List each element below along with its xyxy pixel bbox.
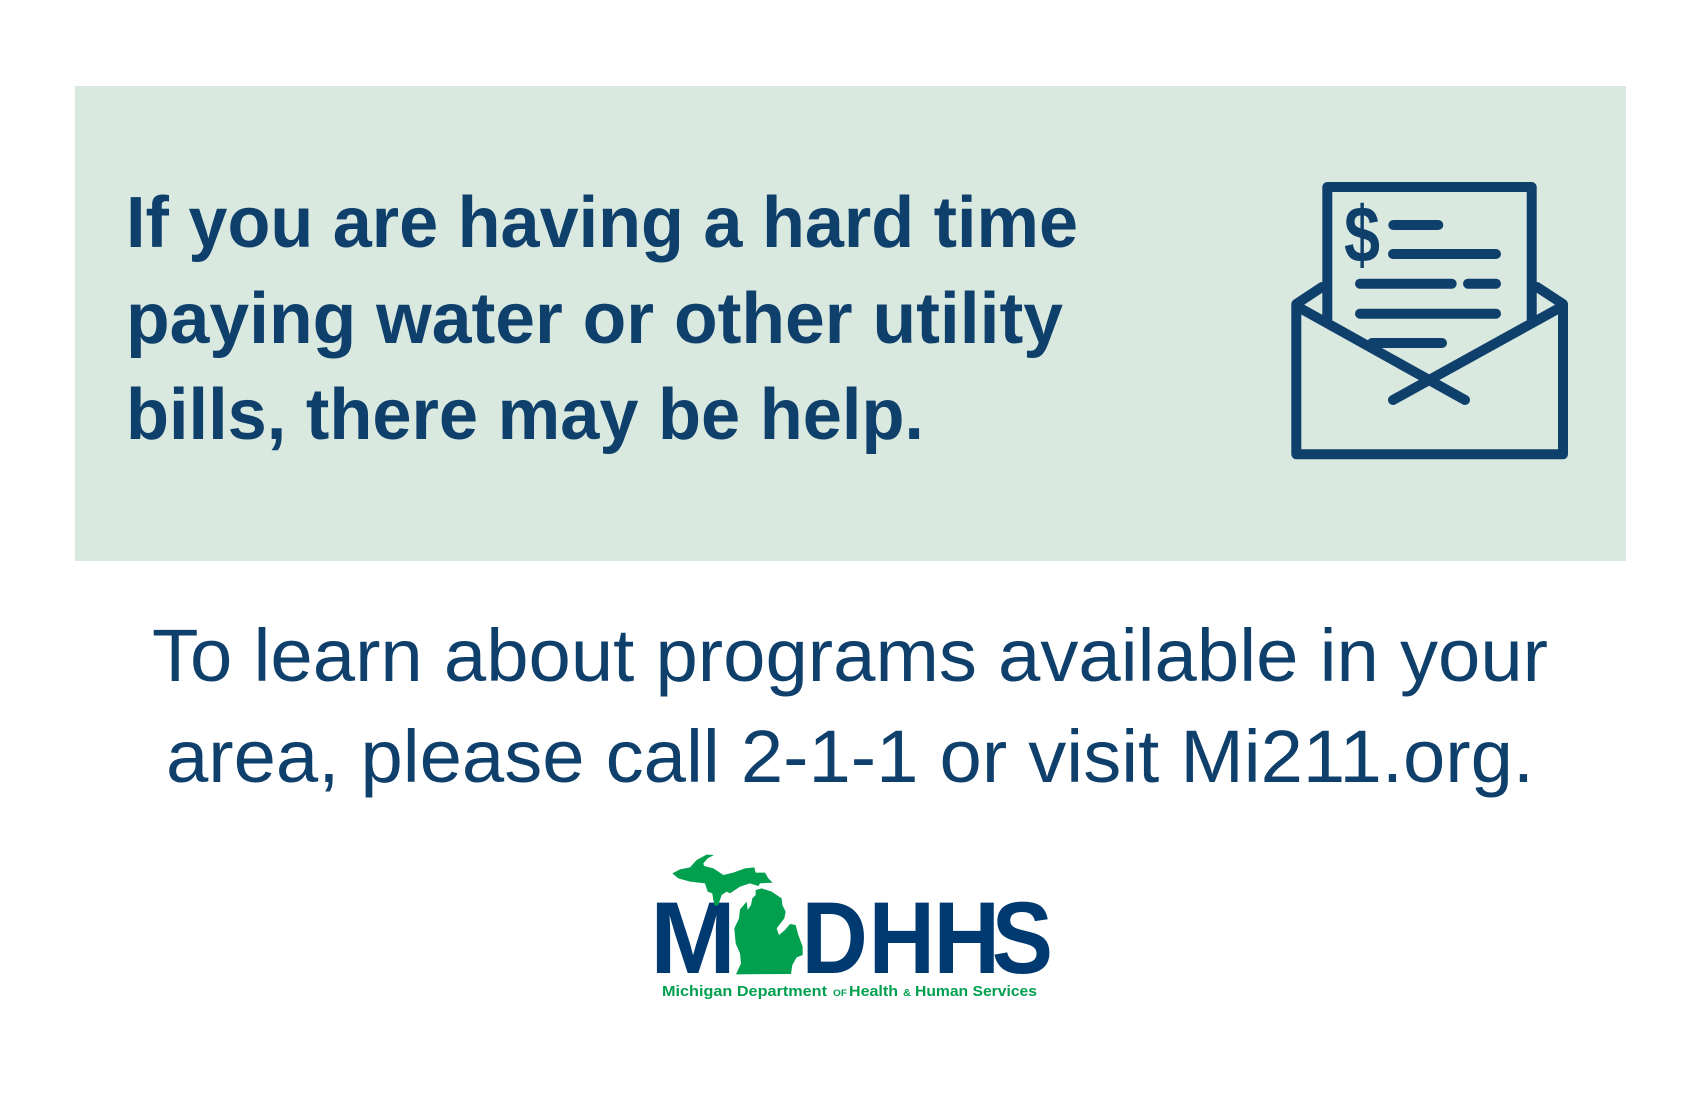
heading: hard time paying bills: If you are having a hard time bbox=[126, 183, 1078, 263]
logo wordmark bbox=[650, 880, 1053, 995]
text block: call to action: To learn about programs available in your bbox=[152, 614, 1548, 697]
logo wordmark: DHHS bbox=[802, 880, 1053, 995]
logo: MDHHS bbox=[650, 855, 1053, 1000]
logo tagline: Health bbox=[849, 983, 898, 1000]
logo tagline bbox=[662, 983, 1037, 1000]
icon: open envelope with bill: $ bbox=[1344, 190, 1380, 279]
icon: open envelope with bill bbox=[1296, 187, 1563, 454]
logo tagline: OF bbox=[833, 988, 848, 998]
logo: Michigan map bbox=[672, 855, 803, 974]
heading: hard time paying bills: paying water or other utility bbox=[126, 279, 1063, 359]
logo tagline: & bbox=[903, 988, 911, 999]
logo tagline: Michigan Department bbox=[662, 983, 827, 1000]
logo tagline: Human Services bbox=[915, 983, 1037, 1000]
logo wordmark: M bbox=[650, 881, 736, 995]
heading: hard time paying bills bbox=[126, 183, 1078, 455]
text block: call to action: area, please call 2-1-1 or visit Mi211.org. bbox=[166, 715, 1534, 798]
heading: hard time paying bills: bills, there may be help. bbox=[126, 375, 924, 455]
panel: green banner bbox=[75, 86, 1626, 561]
text block: call to action bbox=[152, 614, 1548, 798]
